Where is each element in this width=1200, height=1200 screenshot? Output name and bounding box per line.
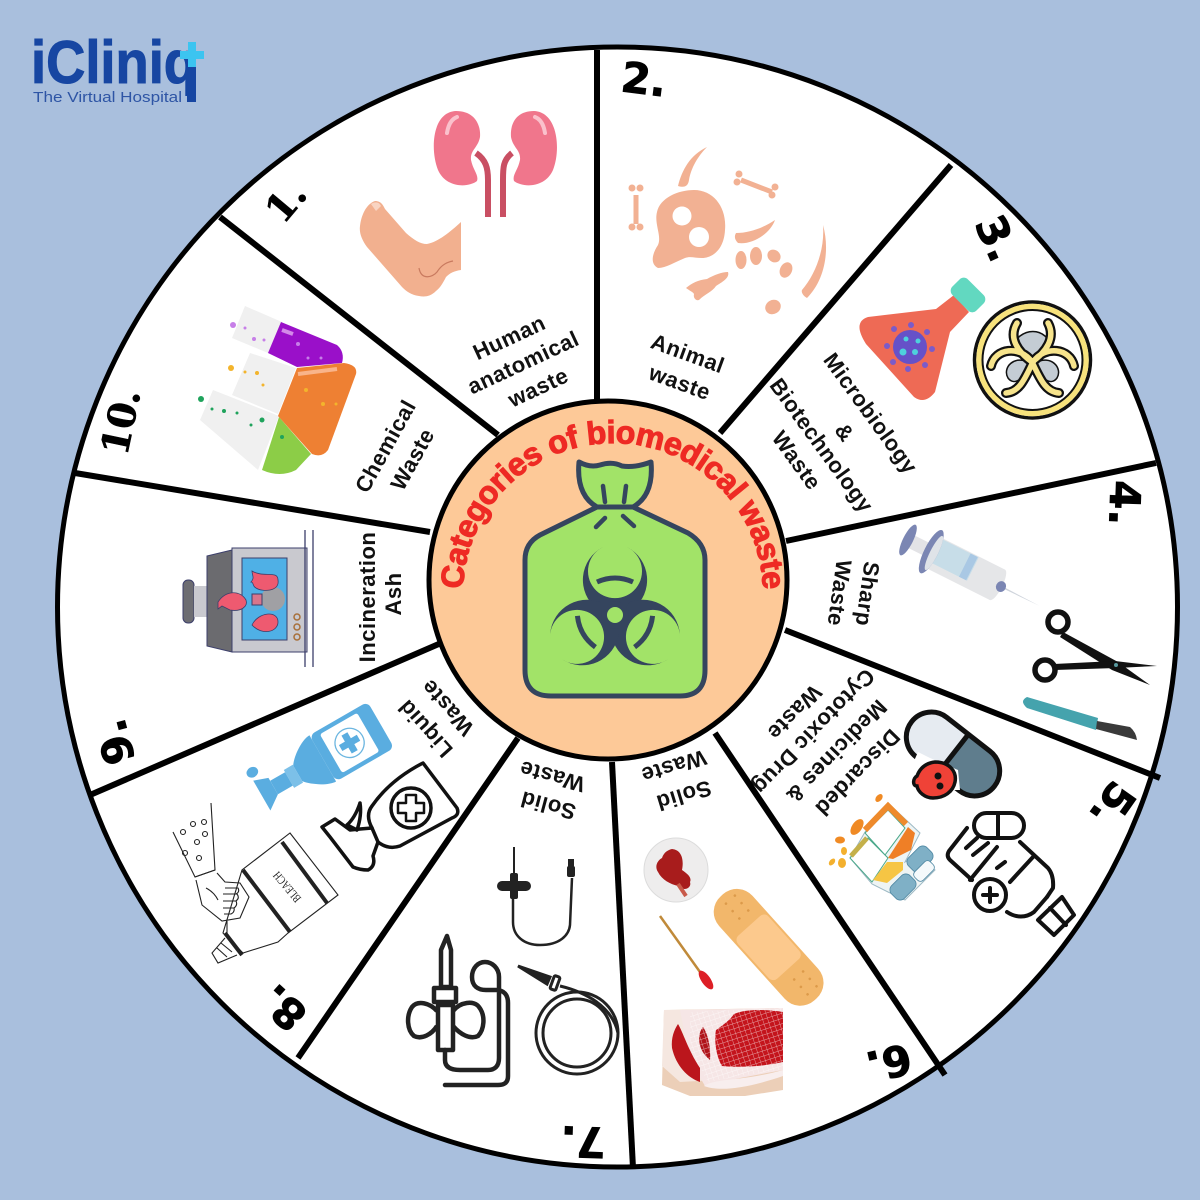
number 7: 7.: [560, 1116, 606, 1167]
panel 5: discarded medicines and cytotoxic drug waste: [715, 630, 1152, 1065]
icon: syringe: [893, 516, 1050, 627]
icon: blood-stained cotton: [644, 838, 708, 902]
panel 6: solid waste gauze and bandage: [612, 733, 938, 1167]
icon: green biohazard waste bag: [525, 462, 705, 696]
label: chemical waste: Chemical: [350, 396, 421, 497]
label: sharp waste: Sharp: [851, 560, 884, 628]
icon: butterfly needle small: [497, 847, 575, 945]
number 3: 3.: [965, 208, 1028, 269]
label: discarded medicines and cytotoxic drug waste: Medicines &: [781, 695, 892, 808]
icon: flask with virus: [859, 275, 988, 400]
icon: bloody gauze photo: [662, 1008, 783, 1096]
label: liquid waste: Waste: [416, 675, 479, 741]
icon: spray bottle: [322, 763, 458, 870]
label: microbiology and biotechnology waste: Waste: [767, 426, 826, 495]
label: solid waste: Solid: [518, 786, 579, 825]
label: human anatomical waste: waste: [503, 363, 572, 413]
panel 8: liquid waste: [90, 640, 518, 1058]
logo: iClinic: The Virtual Hospital: [33, 89, 182, 106]
title on arc: Categories of biomedical waste: [441, 419, 782, 589]
panel 1: human anatomical waste: [220, 50, 597, 435]
number 4: 4.: [1099, 480, 1150, 526]
number 6: 6.: [861, 1034, 916, 1091]
label: microbiology and biotechnology waste: Biotechnology: [765, 374, 879, 517]
label: solid waste: [517, 756, 587, 825]
label: discarded medicines and cytotoxic drug waste: Cytotoxic Drug: [747, 664, 880, 800]
panel 9: incineration ash: [58, 473, 448, 795]
icon: test tubes: [198, 306, 356, 474]
icon: capsule with skull: [896, 702, 1010, 806]
icon: foot: [360, 201, 461, 296]
number 10: 10.: [92, 385, 149, 459]
icon: biohazard circle: [974, 302, 1090, 418]
label: incineration ash: Ash: [381, 572, 406, 616]
icon: bandage: [705, 880, 832, 1014]
label: animal waste: [645, 329, 728, 405]
icon: cotton swab: [660, 916, 716, 992]
label: discarded medicines and cytotoxic drug waste: Waste: [763, 680, 827, 745]
logo: iClinic: iCliniq: [31, 29, 197, 96]
icon: pill and medicine bottle: [948, 813, 1074, 935]
label: sharp waste: Waste: [823, 558, 857, 628]
label: solid waste: Solid: [653, 775, 714, 816]
label: animal waste: Animal: [648, 329, 728, 378]
label: solid waste: Waste: [517, 756, 587, 797]
label: solid waste: [638, 745, 714, 816]
number 5: 5.: [1080, 772, 1146, 837]
label: microbiology and biotechnology waste: [765, 348, 923, 517]
panel 7: solid waste infusion sets: [298, 738, 633, 1167]
icon: scissors: [1035, 612, 1157, 685]
icon: scalpel: [1023, 697, 1137, 740]
panel 4: sharp waste: [785, 463, 1176, 775]
icon: blue sanitizer bottle: [245, 700, 394, 818]
icon: coiled tube: [518, 966, 618, 1074]
number 9: 9.: [86, 714, 145, 770]
label: microbiology and biotechnology waste: &: [830, 418, 860, 446]
panel 2: animal waste: [597, 50, 951, 433]
label: liquid waste: [393, 675, 479, 763]
number 2: 2.: [619, 52, 669, 107]
icon: burnt bottles: [828, 793, 936, 903]
number 1: 1.: [256, 172, 316, 231]
icon: hand holding bleach bottle: [173, 803, 338, 963]
icon: animal bones and skull: [628, 147, 826, 317]
label: liquid waste: Liquid: [393, 695, 458, 763]
hub: categories of biomedical waste: [426, 398, 790, 762]
icon: butterfly needle large: [408, 936, 508, 1085]
label: sharp waste: [823, 558, 884, 628]
icon: kidneys: [434, 111, 557, 217]
label: human anatomical waste: Human: [469, 310, 549, 365]
symbol: biohazard: [540, 547, 690, 677]
label: solid waste: Waste: [638, 745, 709, 788]
label: discarded medicines and cytotoxic drug waste: Discarded: [810, 724, 905, 821]
label: human anatomical waste: anatomical: [464, 326, 583, 399]
label: animal waste: waste: [645, 359, 714, 405]
label: microbiology and biotechnology waste: Microbiology: [818, 348, 923, 479]
panel 10: chemical waste: [75, 217, 498, 532]
icon: hand holding bleach bottle: BLEACH: [270, 869, 304, 905]
label: incineration ash: Incineration: [355, 532, 380, 662]
panel 3: microbiology and biotechnology waste: [720, 165, 1156, 541]
icon: incinerator: [183, 530, 313, 667]
label: incineration ash: [355, 532, 406, 662]
label: chemical waste: Waste: [385, 424, 439, 494]
number 8: 8.: [250, 974, 317, 1041]
